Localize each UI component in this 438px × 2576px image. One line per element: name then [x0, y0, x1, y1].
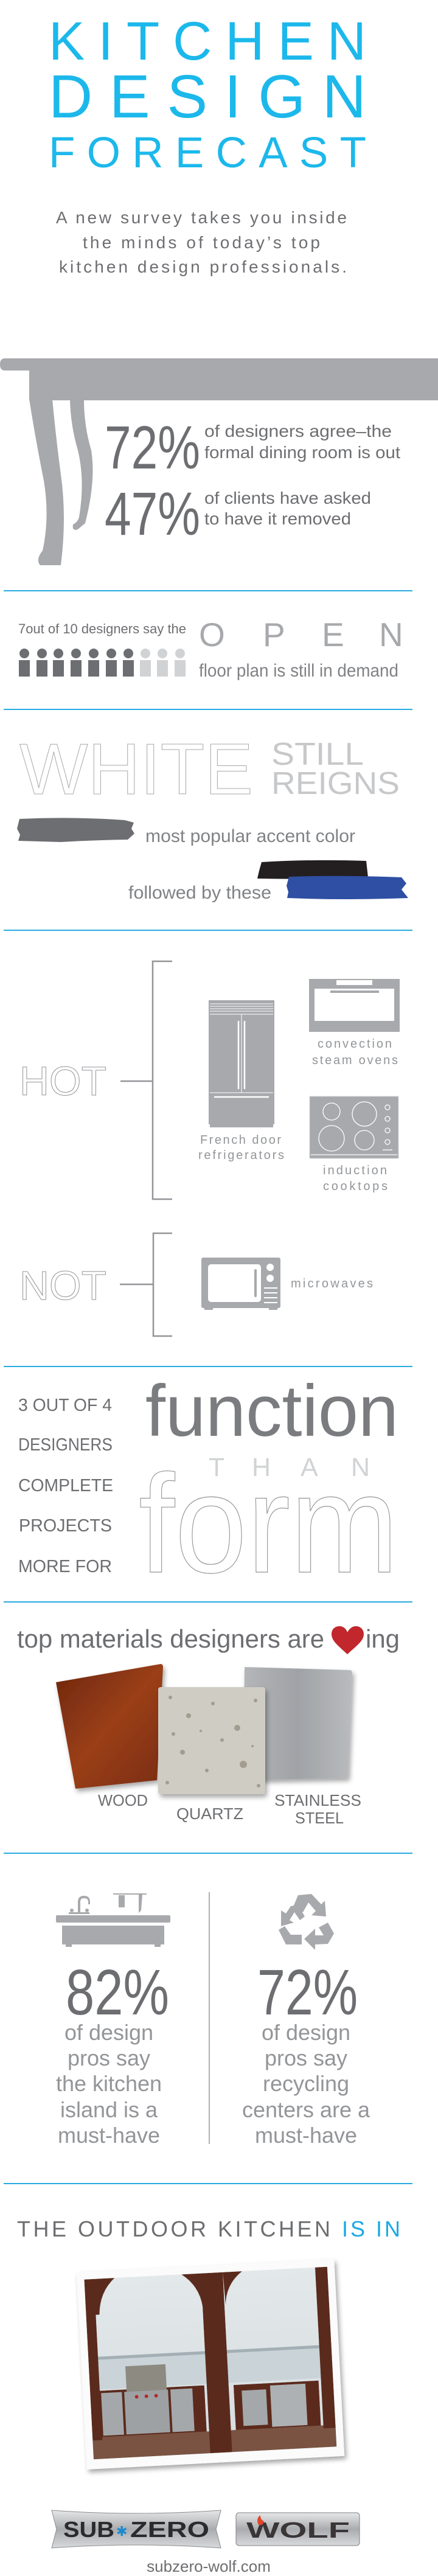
panel: hot: French door [200, 1133, 281, 1147]
swatch: stainless steel [243, 1667, 352, 1780]
panel: kitchen island stat: must-have [58, 2123, 160, 2148]
panel: recycling stat: must-have [255, 2123, 357, 2148]
swatch: wood [56, 1664, 163, 1789]
panel: kitchen island stat: of design [64, 2020, 153, 2045]
icon: microwave [201, 1258, 280, 1310]
panel: function than form: COMPLETE [18, 1476, 113, 1495]
subtitle: A new survey takes you inside [56, 208, 347, 227]
panel: function than form: A [301, 1453, 318, 1482]
panel: kitchen island stat: the kitchen [56, 2071, 162, 2096]
panel: function than form: form [139, 1446, 398, 1602]
stat: formal dining room: of designers agree–the [204, 422, 392, 440]
panel: function than form: PROJECTS [19, 1516, 112, 1536]
panel: top materials: WOOD [98, 1791, 148, 1809]
panel: open floor plan: N [379, 616, 403, 653]
panel: not: NOT [19, 1263, 106, 1309]
stat: formal dining room: 47% [105, 480, 200, 548]
panel: recycling stat: pros say [265, 2045, 347, 2070]
heading: outdoor kitchen: THE OUTDOOR KITCHEN [17, 2216, 330, 2241]
panel: kitchen island stat: 82% [66, 1957, 169, 2028]
panel: hot: HOT [19, 1059, 106, 1104]
panel: hot: induction [323, 1164, 387, 1177]
panel: hot: steam ovens [312, 1054, 398, 1067]
stat: formal dining room: 72% [105, 414, 200, 482]
icon: dining table [0, 358, 438, 565]
panel: recycling stat [242, 1894, 370, 2148]
panel: function than form: H [252, 1453, 271, 1482]
panel: hot: refrigerators [198, 1149, 284, 1162]
icon: people 7 of 10 [19, 649, 186, 677]
panel: recycling stat: 72% [257, 1957, 358, 2028]
icon: black and blue swatches [257, 860, 408, 899]
title: DESIGN [49, 63, 366, 131]
panel: white still reigns: WHITE [19, 729, 253, 810]
panel: function than form: function [145, 1370, 398, 1452]
logo: sub-zero: SUB [63, 2517, 114, 2542]
stat: formal dining room [105, 414, 400, 548]
panel: kitchen island stat [56, 1893, 170, 2148]
panel: hot: convection [318, 1037, 392, 1051]
panel: function than form: 3 OUT OF 4 [18, 1396, 112, 1415]
icon: induction cooktop [310, 1096, 398, 1158]
panel: function than form [18, 1370, 398, 1602]
icon: french door refrigerator [209, 1000, 274, 1127]
logo: sub-zero [52, 2510, 221, 2548]
panel: top materials: STAINLESS [274, 1791, 361, 1809]
panel: white still reigns: REIGNS [271, 766, 400, 801]
panel: open floor plan: O [199, 616, 225, 653]
title: KITCHEN [49, 10, 366, 71]
logo: wolf: WOLF [246, 2518, 350, 2543]
panel: not: microwaves [291, 1277, 373, 1290]
logo: wolf [236, 2513, 360, 2546]
icon: recycle [279, 1894, 334, 1950]
panel: hot [19, 961, 400, 1199]
panel: white still reigns: most popular accent color [145, 826, 355, 846]
panel: recycling stat: centers are a [242, 2097, 370, 2122]
panel: function than form: MORE FOR [18, 1557, 112, 1576]
panel: hot: cooktops [323, 1180, 388, 1193]
icon: island sink [56, 1893, 170, 1947]
panel: top materials [17, 1624, 400, 1827]
subtitle: kitchen design professionals. [59, 257, 347, 276]
panel: not [19, 1233, 373, 1336]
panel: top materials: STEEL [295, 1809, 344, 1827]
panel: function than form: DESIGNERS [18, 1435, 113, 1455]
panel: open floor plan [18, 616, 403, 681]
stat: formal dining room: of clients have asked [204, 489, 371, 507]
logo: sub-zero: ZERO [130, 2517, 209, 2542]
swatch: quartz [158, 1687, 265, 1794]
title [49, 10, 366, 177]
photo: outdoor kitchen [77, 2259, 344, 2470]
subtitle: the minds of today’s top [83, 233, 320, 252]
logo: sub-zero: ✱ [116, 2524, 127, 2539]
heading: outdoor kitchen: IS IN [342, 2216, 400, 2241]
subtitle [56, 208, 347, 276]
panel: white still reigns: followed by these [128, 883, 271, 903]
panel: open floor plan: floor plan is still in demand [199, 661, 398, 681]
panel: open floor plan: P [263, 616, 285, 653]
panel: open floor plan: 7out of 10 designers say the [18, 621, 186, 636]
panel: recycling stat: recycling [263, 2071, 349, 2096]
stat: formal dining room: formal dining room is out [204, 443, 400, 462]
panel: kitchen island stat: island is a [60, 2097, 158, 2122]
panel: top materials: QUARTZ [176, 1805, 243, 1823]
panel: top materials: top materials designers are [17, 1624, 324, 1653]
panel: function than form: N [351, 1453, 370, 1482]
stat: formal dining room: to have it removed [204, 509, 351, 528]
icon: heart [332, 1626, 364, 1654]
panel: open floor plan: E [322, 616, 344, 653]
icon: gray paint swatch [17, 818, 134, 842]
title: FORECAST [49, 129, 366, 177]
panel: kitchen island stat: pros say [68, 2045, 150, 2070]
url: subzero-wolf.com [147, 2557, 271, 2575]
panel: white still reigns: STILL [271, 737, 364, 772]
icon: convection steam oven [309, 979, 400, 1032]
panel: recycling stat: of design [262, 2020, 350, 2045]
panel: top materials: ing [366, 1624, 400, 1653]
panel: white still reigns [17, 729, 408, 903]
panel: function than form: T [209, 1453, 224, 1482]
